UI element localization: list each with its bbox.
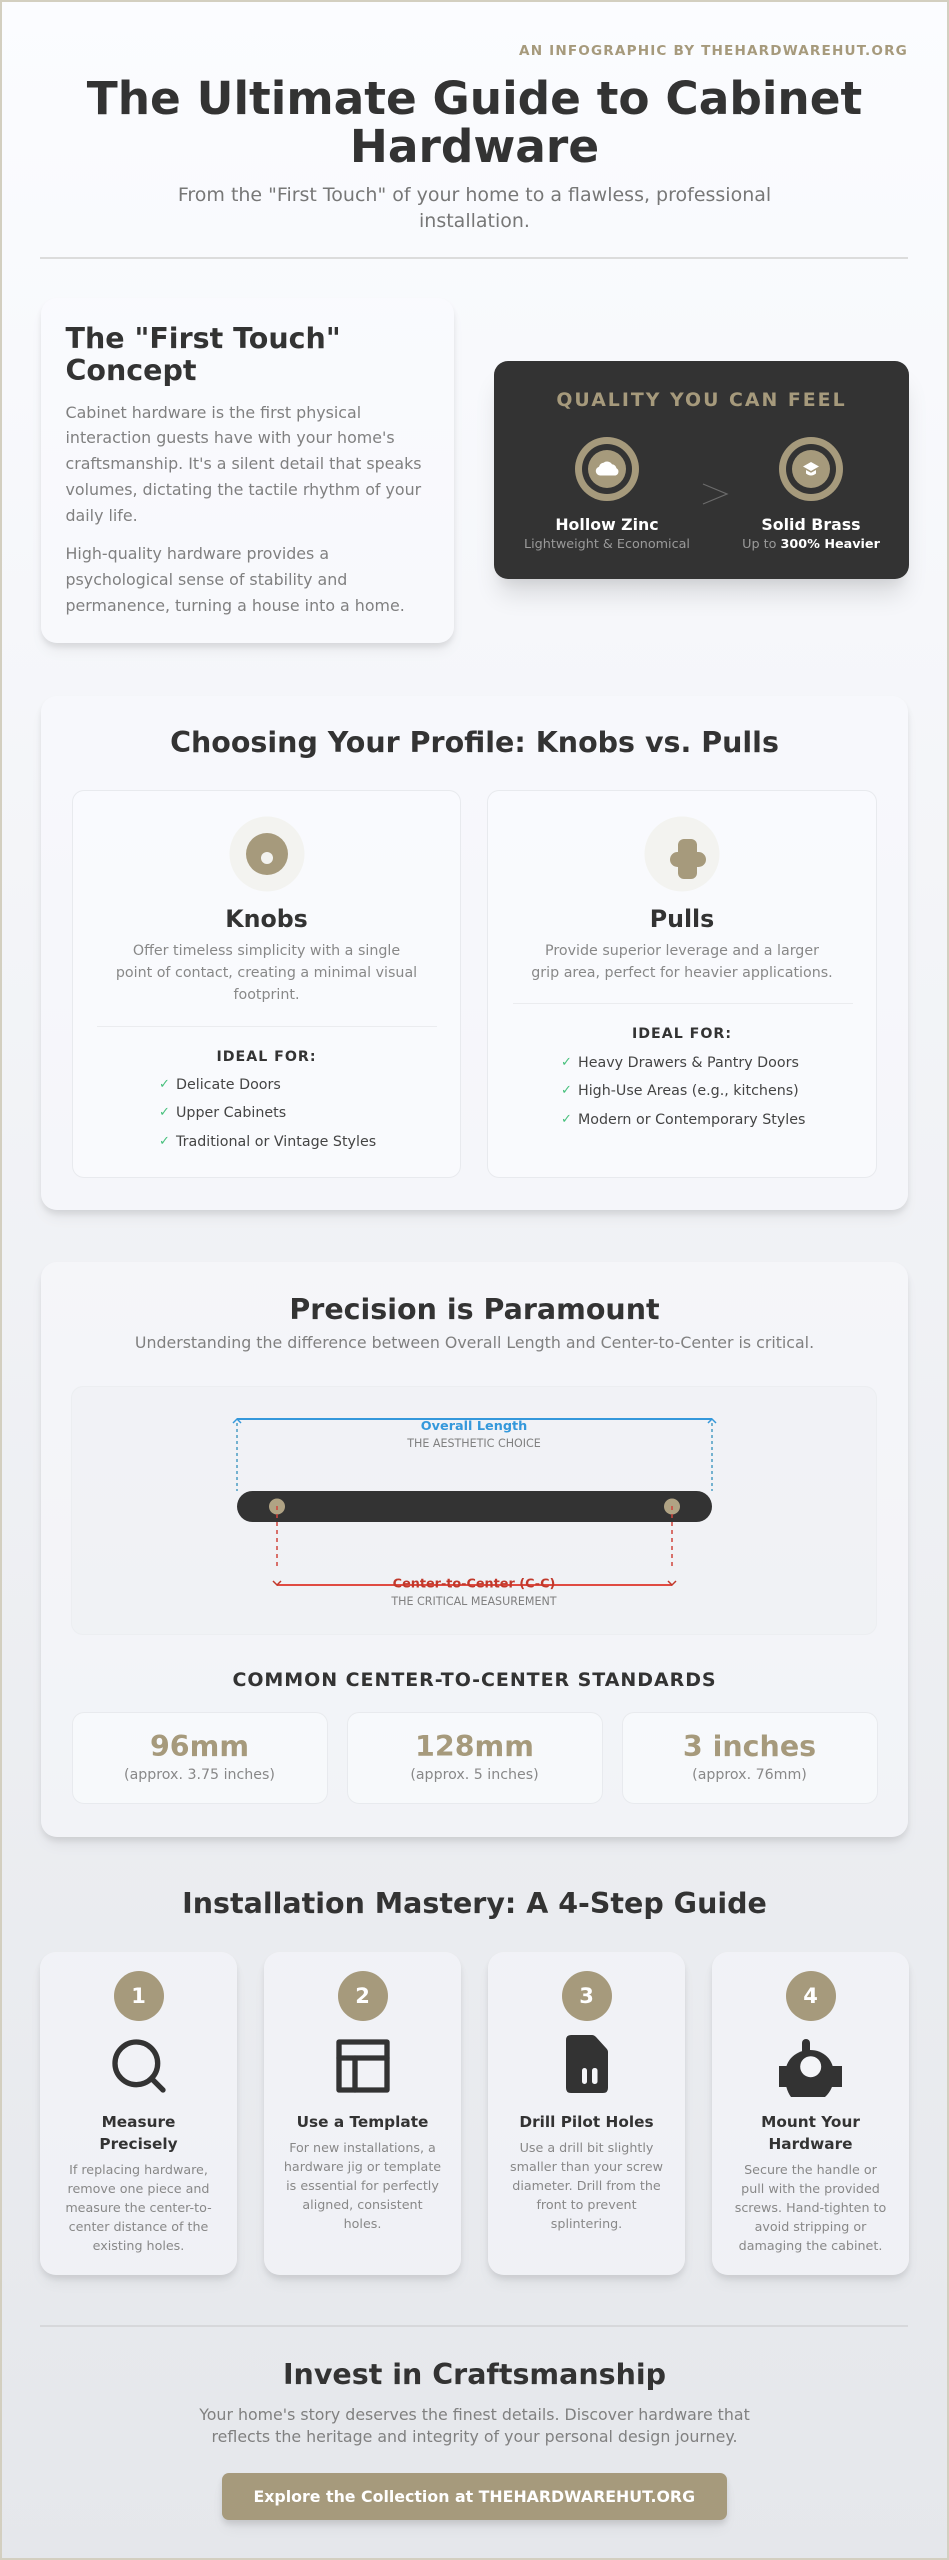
description — [531, 942, 833, 980]
description: footprint. — [233, 986, 300, 1002]
step title: Use a Template — [297, 2113, 428, 2131]
description: Offer timeless simplicity with a single — [133, 942, 400, 958]
value: 96mm — [150, 1730, 249, 1763]
name: Knobs — [225, 905, 308, 933]
installation heading: Installation Mastery: A 4-Step Guide — [182, 1887, 767, 1920]
heading — [66, 322, 341, 387]
heading: The "First Touch" — [66, 322, 341, 355]
step number — [786, 1971, 836, 2021]
ideal for list — [159, 1077, 376, 1150]
overall length guides — [233, 1419, 716, 1491]
caption: aesthetic choice: THE AESTHETIC CHOICE — [406, 1437, 541, 1450]
step title: Hardware — [768, 2135, 852, 2153]
title: Hardware — [350, 120, 599, 172]
paragraph 2: permanence, turning a house into a home. — [66, 596, 405, 615]
ideal for list — [561, 1055, 805, 1128]
title: The Ultimate Guide to Cabinet — [87, 72, 862, 124]
icon: pull — [644, 816, 720, 892]
check: ✓ — [561, 1055, 572, 1070]
ideal for heading: IDEAL FOR: — [632, 1026, 732, 1042]
value: 3 inches — [683, 1730, 816, 1763]
subtitle: From the "First Touch" of your home to a flawless, professional — [178, 184, 771, 206]
divider line — [97, 1026, 437, 1027]
step text — [284, 2140, 441, 2231]
subtitle: installation. — [419, 210, 530, 232]
description: grip area, perfect for heavier applications. — [531, 964, 833, 980]
label: center to center: Center-to-Center (C-C) — [393, 1576, 555, 1592]
footer heading: Invest in Craftsmanship — [283, 2358, 666, 2390]
header divider line — [40, 257, 908, 259]
step text: Secure the handle or — [744, 2162, 877, 2176]
heading: Choosing Your Profile: Knobs vs. Pulls — [170, 726, 779, 758]
note: (approx. 5 inches) — [410, 1766, 539, 1782]
paragraph 1: interaction guests have with your home's — [66, 428, 395, 447]
panel: quality you can feel — [494, 361, 909, 579]
step 4 card — [712, 1952, 909, 2275]
panel: precision is paramount — [41, 1262, 908, 1837]
step number — [338, 1971, 388, 2021]
paragraph 2 — [66, 544, 405, 615]
step text — [65, 2162, 212, 2253]
center-to-center guides — [273, 1506, 676, 1585]
screw left — [269, 1498, 285, 1514]
value: 128mm — [415, 1730, 534, 1763]
description: Provide superior leverage and a larger — [545, 942, 819, 958]
divider line — [513, 1003, 853, 1004]
note: (approx. 76mm) — [692, 1766, 807, 1782]
description — [116, 942, 417, 1002]
step title: Measure — [102, 2113, 175, 2131]
paragraph 2: psychological sense of stability and — [66, 570, 347, 589]
step title — [761, 2113, 860, 2153]
step number: 4 — [803, 1984, 818, 2008]
standard: 128mm — [346, 1712, 602, 1804]
diagram panel — [71, 1386, 877, 1635]
step text: measure the center-to- — [65, 2200, 212, 2215]
icon: mounted hardware — [779, 2039, 842, 2097]
step text: aligned, consistent — [302, 2197, 423, 2212]
item: High-Use Areas (e.g., kitchens) — [578, 1083, 799, 1099]
step text: avoid stripping or — [755, 2219, 866, 2234]
screw right — [664, 1498, 680, 1514]
caption: critical measurement: THE CRITICAL MEASUREMENT — [390, 1595, 557, 1608]
paragraph 1: Cabinet hardware is the first physical — [66, 402, 361, 422]
subtitle — [178, 184, 771, 232]
item: Traditional or Vintage Styles — [176, 1134, 376, 1150]
label: hollow zinc: Hollow Zinc — [555, 515, 659, 534]
step title: Drill Pilot Holes — [519, 2113, 654, 2131]
step text: hardware jig or template — [284, 2159, 441, 2174]
item: Modern or Contemporary Styles — [578, 1112, 805, 1128]
icon: template layout — [336, 2039, 390, 2093]
step text — [510, 2140, 663, 2231]
caption: hollow zinc: Lightweight & Economical — [524, 537, 690, 552]
card: pulls — [487, 790, 877, 1178]
step title: Mount Your — [761, 2113, 860, 2131]
eyebrow byline: AN INFOGRAPHIC BY THEHARDWAREHUT.ORG — [519, 43, 908, 59]
paragraph 1: daily life. — [66, 506, 138, 525]
heading: Concept — [66, 354, 197, 387]
step text: diameter. Drill from the — [512, 2178, 661, 2193]
step text: For new installations, a — [289, 2140, 436, 2154]
call to action button: Explore the Collection at THEHARDWAREHUT.ORG — [253, 2487, 695, 2506]
measurement diagram — [232, 1418, 716, 1608]
panel: first touch concept — [41, 298, 454, 643]
item: Delicate Doors — [176, 1077, 281, 1093]
step title — [99, 2113, 178, 2153]
footer divider line — [40, 2325, 908, 2327]
description: point of contact, creating a minimal visual — [116, 964, 417, 980]
step text: screws. Hand-tighten to — [735, 2200, 886, 2215]
step number — [114, 1971, 164, 2021]
step number: 2 — [355, 1984, 370, 2008]
note: (approx. 3.75 inches) — [124, 1766, 275, 1782]
card: knobs — [72, 790, 461, 1178]
check: ✓ — [159, 1105, 170, 1120]
step text: damaging the cabinet. — [739, 2238, 882, 2253]
paragraph 2: High-quality hardware provides a — [66, 544, 329, 563]
paragraph 1: craftsmanship. It's a silent detail that speaks — [66, 454, 422, 473]
icon: drill holes — [566, 2035, 608, 2093]
pull handle bar — [237, 1491, 712, 1522]
check: ✓ — [561, 1112, 572, 1127]
step text: center distance of the — [69, 2219, 208, 2234]
step text: If replacing hardware, — [69, 2162, 208, 2176]
icon: magnifier — [112, 2039, 166, 2093]
standard: 3 inches — [622, 1712, 878, 1804]
ideal for heading: IDEAL FOR: — [216, 1049, 317, 1065]
panel heading: QUALITY YOU CAN FEEL — [556, 388, 847, 410]
standards heading: COMMON CENTER-TO-CENTER STANDARDS — [232, 1668, 717, 1690]
step text: smaller than your screw — [510, 2159, 663, 2174]
label: overall length: Overall Length — [421, 1419, 527, 1434]
step title: Precisely — [99, 2135, 178, 2153]
step text: splintering. — [551, 2216, 622, 2231]
step text: is essential for perfectly — [286, 2178, 439, 2193]
subheading: Understanding the difference between Overall Length and Center-to-Center is critical. — [135, 1333, 814, 1352]
icon: hollow zinc badge — [575, 437, 639, 501]
paragraph 1 — [66, 402, 422, 525]
icon: knob — [230, 816, 304, 892]
step text: holes. — [344, 2216, 381, 2231]
label: solid brass: Solid Brass — [761, 515, 861, 534]
step text: remove one piece and — [68, 2181, 209, 2196]
step text: Use a drill bit slightly — [520, 2140, 653, 2154]
check: ✓ — [159, 1134, 170, 1149]
caption: solid brass: Up to 300% Heavier — [742, 537, 880, 552]
call to action button — [222, 2473, 727, 2520]
step text: existing holes. — [93, 2238, 184, 2253]
footer text: Your home's story deserves the finest details. Discover hardware that — [199, 2405, 750, 2424]
step number: 3 — [579, 1984, 594, 2008]
step 3 card — [488, 1952, 685, 2275]
step 1 card — [40, 1952, 237, 2275]
icon: greater-than comparison arrow — [702, 484, 728, 504]
step text — [735, 2162, 886, 2253]
item: Upper Cabinets — [176, 1105, 286, 1121]
standard: 96mm — [72, 1712, 328, 1804]
step text: front to prevent — [536, 2197, 637, 2212]
step text: pull with the provided — [741, 2181, 880, 2196]
header — [40, 43, 908, 259]
panel: knobs vs pulls — [41, 696, 908, 1210]
step number — [562, 1971, 612, 2021]
step number: 1 — [131, 1984, 146, 2008]
name: Pulls — [650, 905, 714, 933]
icon: solid brass badge — [779, 437, 843, 501]
step 2 card — [264, 1952, 461, 2275]
item: Heavy Drawers & Pantry Doors — [578, 1055, 799, 1071]
footer text — [199, 2405, 750, 2446]
check: ✓ — [561, 1083, 572, 1098]
heading: Precision is Paramount — [289, 1292, 660, 1326]
paragraph 1: volumes, dictating the tactile rhythm of your — [66, 480, 421, 499]
check: ✓ — [159, 1077, 170, 1092]
footer — [40, 2325, 908, 2528]
title — [86, 72, 862, 172]
footer text: reflects the heritage and integrity of your personal design journey. — [212, 2427, 737, 2446]
